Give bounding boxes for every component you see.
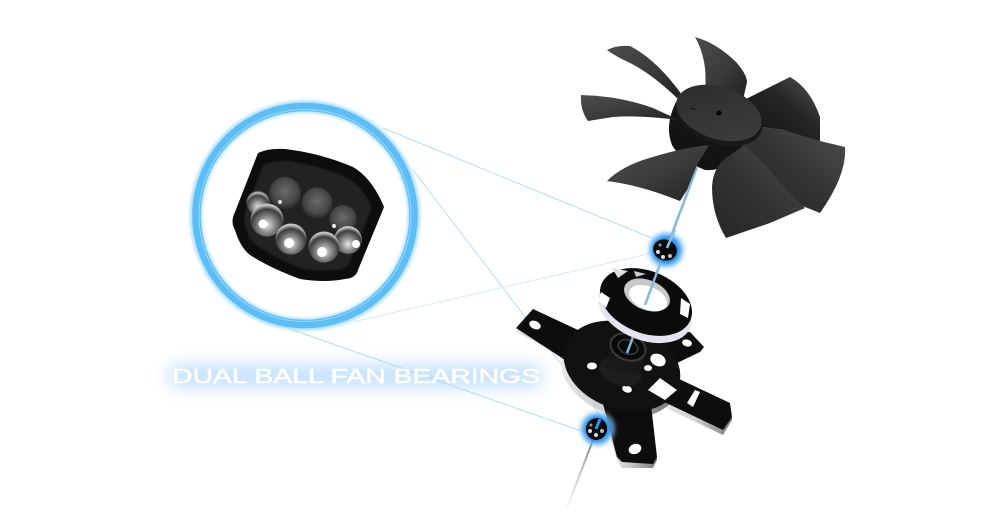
title: dual ball fan bearings — [168, 366, 542, 388]
fan hub body — [669, 100, 745, 170]
fan blades — [581, 37, 845, 238]
fan axis line — [567, 167, 697, 508]
upper bearing with glow — [645, 229, 687, 271]
magnified bearing callout — [196, 106, 414, 324]
magnified bearing — [232, 149, 384, 281]
bracket holes — [528, 319, 700, 456]
glowing ring — [196, 106, 414, 324]
bracket silver edge — [516, 309, 732, 468]
connector lines — [290, 128, 654, 434]
mounting bracket — [516, 305, 732, 468]
bracket black plate — [516, 305, 732, 464]
bracket centre post — [595, 329, 649, 392]
title: dual ball fan bearings: DUAL BALL FAN BEARINGS — [172, 366, 540, 388]
fan — [581, 37, 845, 238]
retainer ring — [588, 255, 702, 356]
lower bearing with glow — [577, 409, 617, 449]
fan hub cap — [668, 75, 770, 157]
